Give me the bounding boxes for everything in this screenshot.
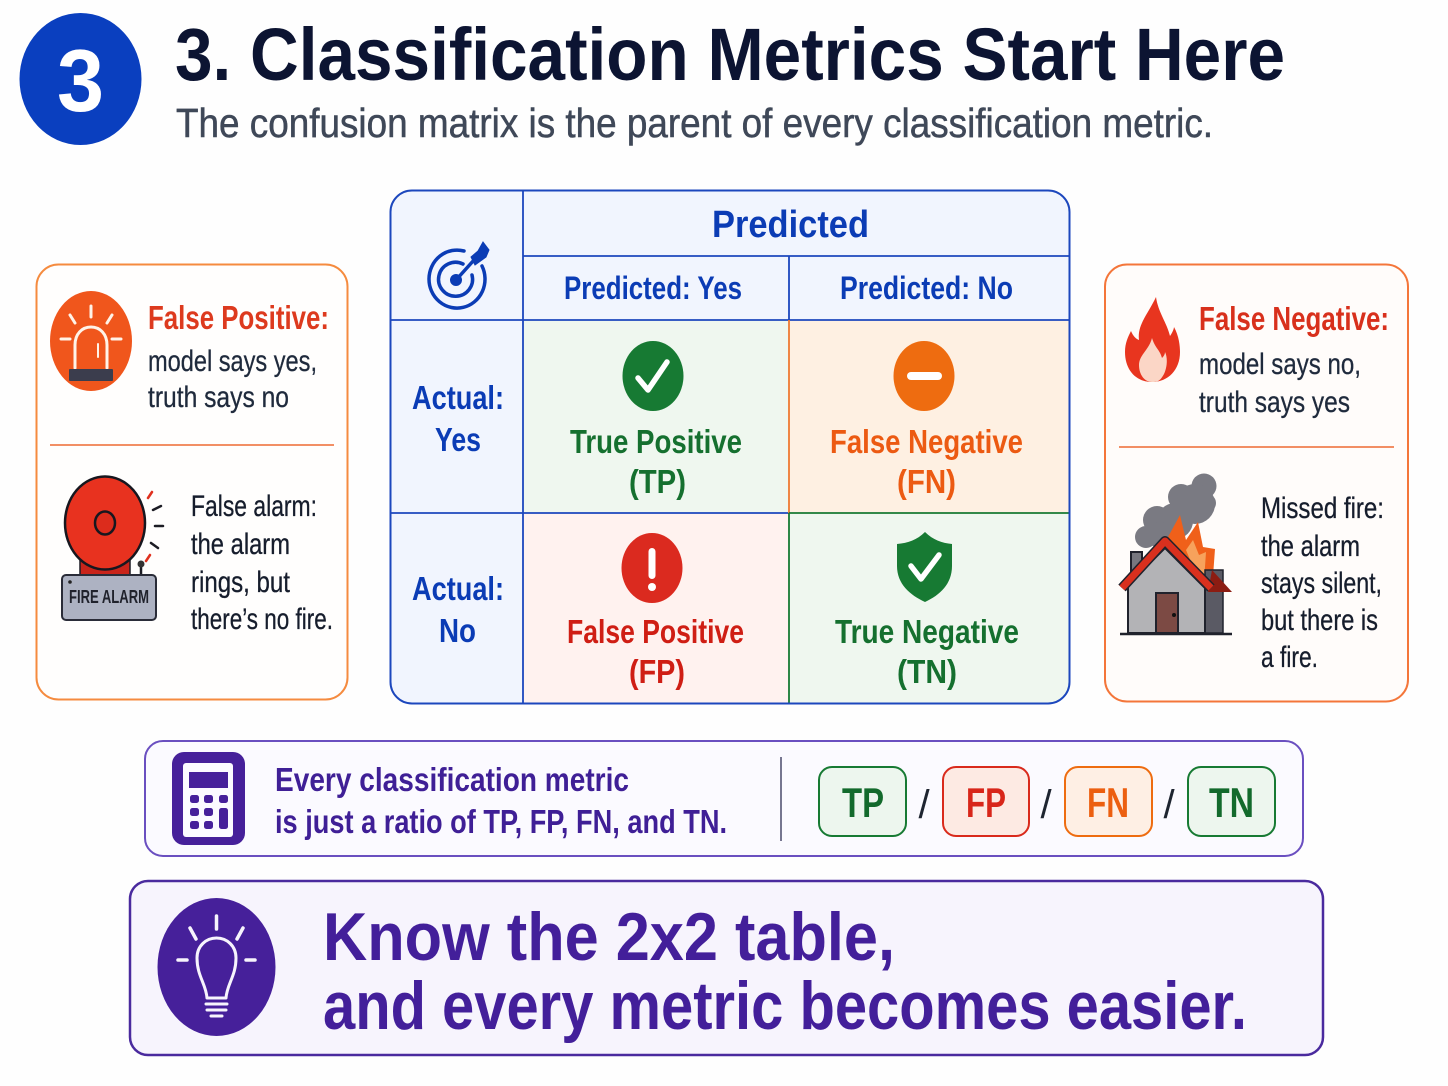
text: missed fire: stays silent,: [1261, 567, 1382, 600]
slash: /: [918, 783, 930, 827]
chip: TP: [819, 767, 906, 836]
panel: ratio of counts: [145, 741, 1303, 856]
icon: flame: [1125, 297, 1180, 382]
icon: light bulb: [158, 898, 276, 1036]
slash: /: [1040, 783, 1052, 827]
header: [20, 13, 1285, 146]
text: missed fire: [1261, 492, 1384, 674]
row label: actual no: No: [439, 612, 476, 649]
cell: true positive: True Positive: [570, 423, 742, 460]
text: model says yes: [148, 345, 317, 414]
chip: TN: [1188, 767, 1275, 836]
text: model says no: [1199, 348, 1361, 419]
takeaway text: [323, 899, 1247, 1044]
row label: actual no: [412, 570, 504, 649]
text: model says yes: truth says no: [148, 381, 289, 414]
icon: burning house: [1120, 474, 1232, 634]
cell: false negative: (FN): [897, 463, 956, 500]
text: missed fire: the alarm: [1261, 530, 1360, 563]
row label: actual yes: Actual:: [412, 379, 504, 416]
text: false alarm: rings, but: [191, 566, 291, 599]
chip: FP: FP: [966, 779, 1006, 826]
column label: predicted yes: Predicted: Yes: [564, 270, 742, 306]
title: 3. Classification Metrics Start Here: [175, 13, 1285, 96]
confusion matrix: [390, 190, 1070, 704]
takeaway text: and every metric becomes easier.: [323, 968, 1247, 1044]
cell: true negative: True Negative: [835, 613, 1019, 650]
icon: section number badge: [20, 13, 142, 145]
panel: false negative: [1105, 264, 1408, 702]
text: false alarm: False alarm:: [191, 490, 317, 523]
column label: predicted no: Predicted: No: [840, 270, 1013, 306]
cell: true positive: [523, 320, 789, 513]
text: missed fire: but there is: [1261, 604, 1378, 637]
chip: FN: FN: [1087, 779, 1129, 826]
icon: section number badge: 3: [57, 31, 104, 130]
takeaway text: Know the 2x2 table,: [323, 899, 895, 975]
row label: actual yes: [412, 379, 504, 458]
text: model says no: model says no,: [1199, 348, 1361, 381]
chip: FP: [943, 767, 1029, 836]
text: false alarm: there’s no fire.: [191, 603, 333, 636]
row label: actual no: Actual:: [412, 570, 504, 607]
text: ratio statement: Every classification metric: [275, 761, 629, 798]
cell: false negative: [789, 320, 1070, 513]
text: ratio statement: is just a ratio of TP, FP, FN, and TN.: [275, 803, 727, 840]
icon: fire alarm bell: FIRE ALARM: [69, 587, 149, 607]
panel: false positive: [36, 264, 348, 700]
text: missed fire: a fire.: [1261, 641, 1318, 674]
icon: shield check: [897, 532, 952, 602]
heading: false positive: False Positive:: [148, 299, 329, 336]
cell: true negative: (TN): [897, 653, 957, 690]
cell: false positive: False Positive: [567, 613, 744, 650]
cell: false positive: [523, 513, 789, 704]
text: false alarm: the alarm: [191, 528, 290, 561]
cell: false positive: (FP): [629, 653, 685, 690]
row label: actual yes: Yes: [435, 421, 481, 458]
text: model says no: truth says yes: [1199, 386, 1350, 419]
icon: check circle: [622, 341, 684, 411]
cell: true positive: (TP): [629, 463, 686, 500]
text: false alarm: [191, 490, 333, 636]
icon: fire alarm bell: [62, 476, 163, 620]
icon: calculator: [172, 752, 245, 845]
icon: exclamation circle: [622, 533, 682, 603]
slash: /: [1163, 783, 1175, 827]
chip: TN: TN: [1209, 779, 1254, 826]
heading: false negative: False Negative:: [1199, 300, 1389, 337]
heading: predicted: Predicted: [712, 204, 869, 246]
cell: true negative: [789, 513, 1070, 704]
chip: TP: TP: [842, 779, 884, 826]
icon: minus circle: [894, 341, 954, 411]
subtitle: The confusion matrix is the parent of every classification metric.: [176, 100, 1213, 146]
text: model says yes: model says yes,: [148, 345, 317, 378]
icon: target: [429, 242, 489, 308]
chip: FN: [1065, 767, 1152, 836]
cell: false negative: False Negative: [830, 423, 1023, 460]
panel: takeaway: [130, 881, 1323, 1055]
text: ratio statement: [275, 761, 727, 840]
text: missed fire: Missed fire:: [1261, 492, 1384, 525]
icon: alarm beacon: [50, 291, 132, 391]
